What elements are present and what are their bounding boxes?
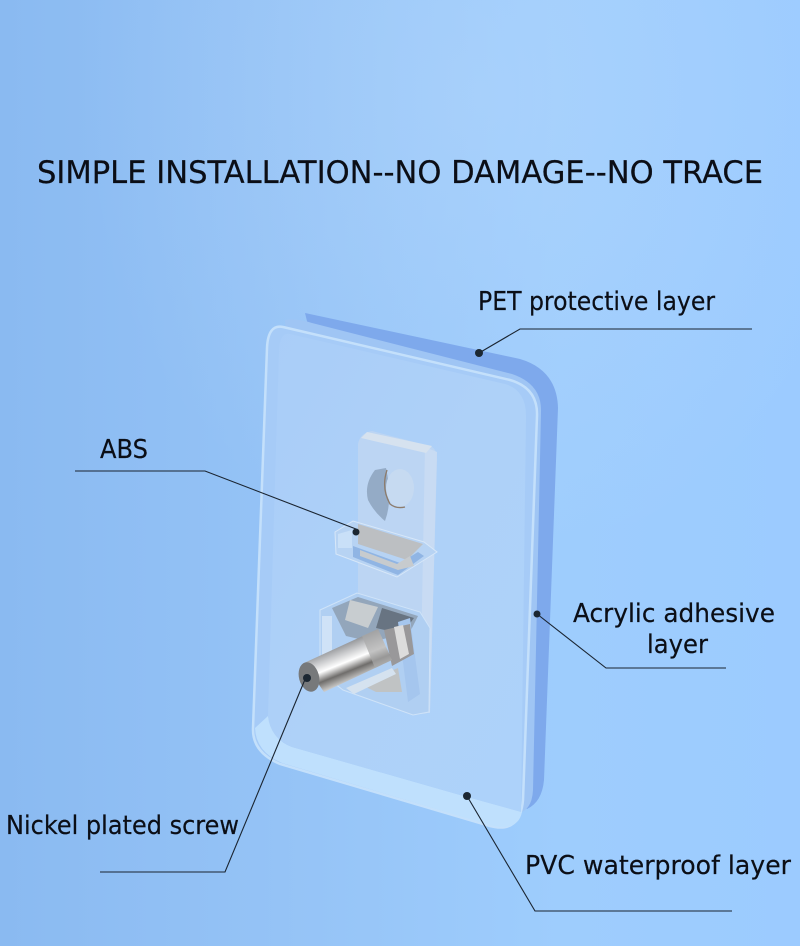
line: PVC	[467, 796, 732, 911]
label: Acrylic adhesive layer: layer	[647, 630, 708, 660]
callout lines	[75, 329, 752, 911]
line: Acrylic	[537, 614, 726, 668]
back layer: acrylic adhesive	[305, 313, 558, 809]
line: PET	[479, 329, 752, 353]
title: SIMPLE INSTALLATION--NO DAMAGE--NO TRACE	[37, 155, 763, 191]
bracket thick edge	[420, 447, 437, 713]
label: Acrylic adhesive layer: Acrylic adhesive	[573, 599, 775, 629]
layered panel	[253, 313, 558, 828]
label: PVC waterproof layer: PVC waterproof layer	[525, 851, 791, 881]
line: screw	[100, 677, 306, 872]
bracket plate	[358, 431, 437, 714]
nickel plated screw	[295, 624, 414, 694]
top edge	[361, 432, 432, 453]
middle layer: PET protective	[285, 319, 541, 814]
lower housing	[320, 593, 430, 715]
hook clip	[335, 521, 437, 577]
inner face	[268, 334, 526, 812]
callout dots	[303, 349, 540, 800]
abs bracket	[295, 431, 437, 715]
bottom lip	[255, 716, 522, 827]
label: Nickel plated screw: Nickel plated screw	[6, 811, 239, 841]
screw hole	[367, 468, 414, 521]
label: ABS: ABS	[100, 435, 148, 465]
label: Acrylic adhesive layer	[573, 599, 775, 660]
label: PET protective layer: PET protective layer	[478, 287, 715, 317]
outer clear layer: PVC waterproof	[253, 327, 537, 828]
line: ABS	[75, 471, 356, 529]
